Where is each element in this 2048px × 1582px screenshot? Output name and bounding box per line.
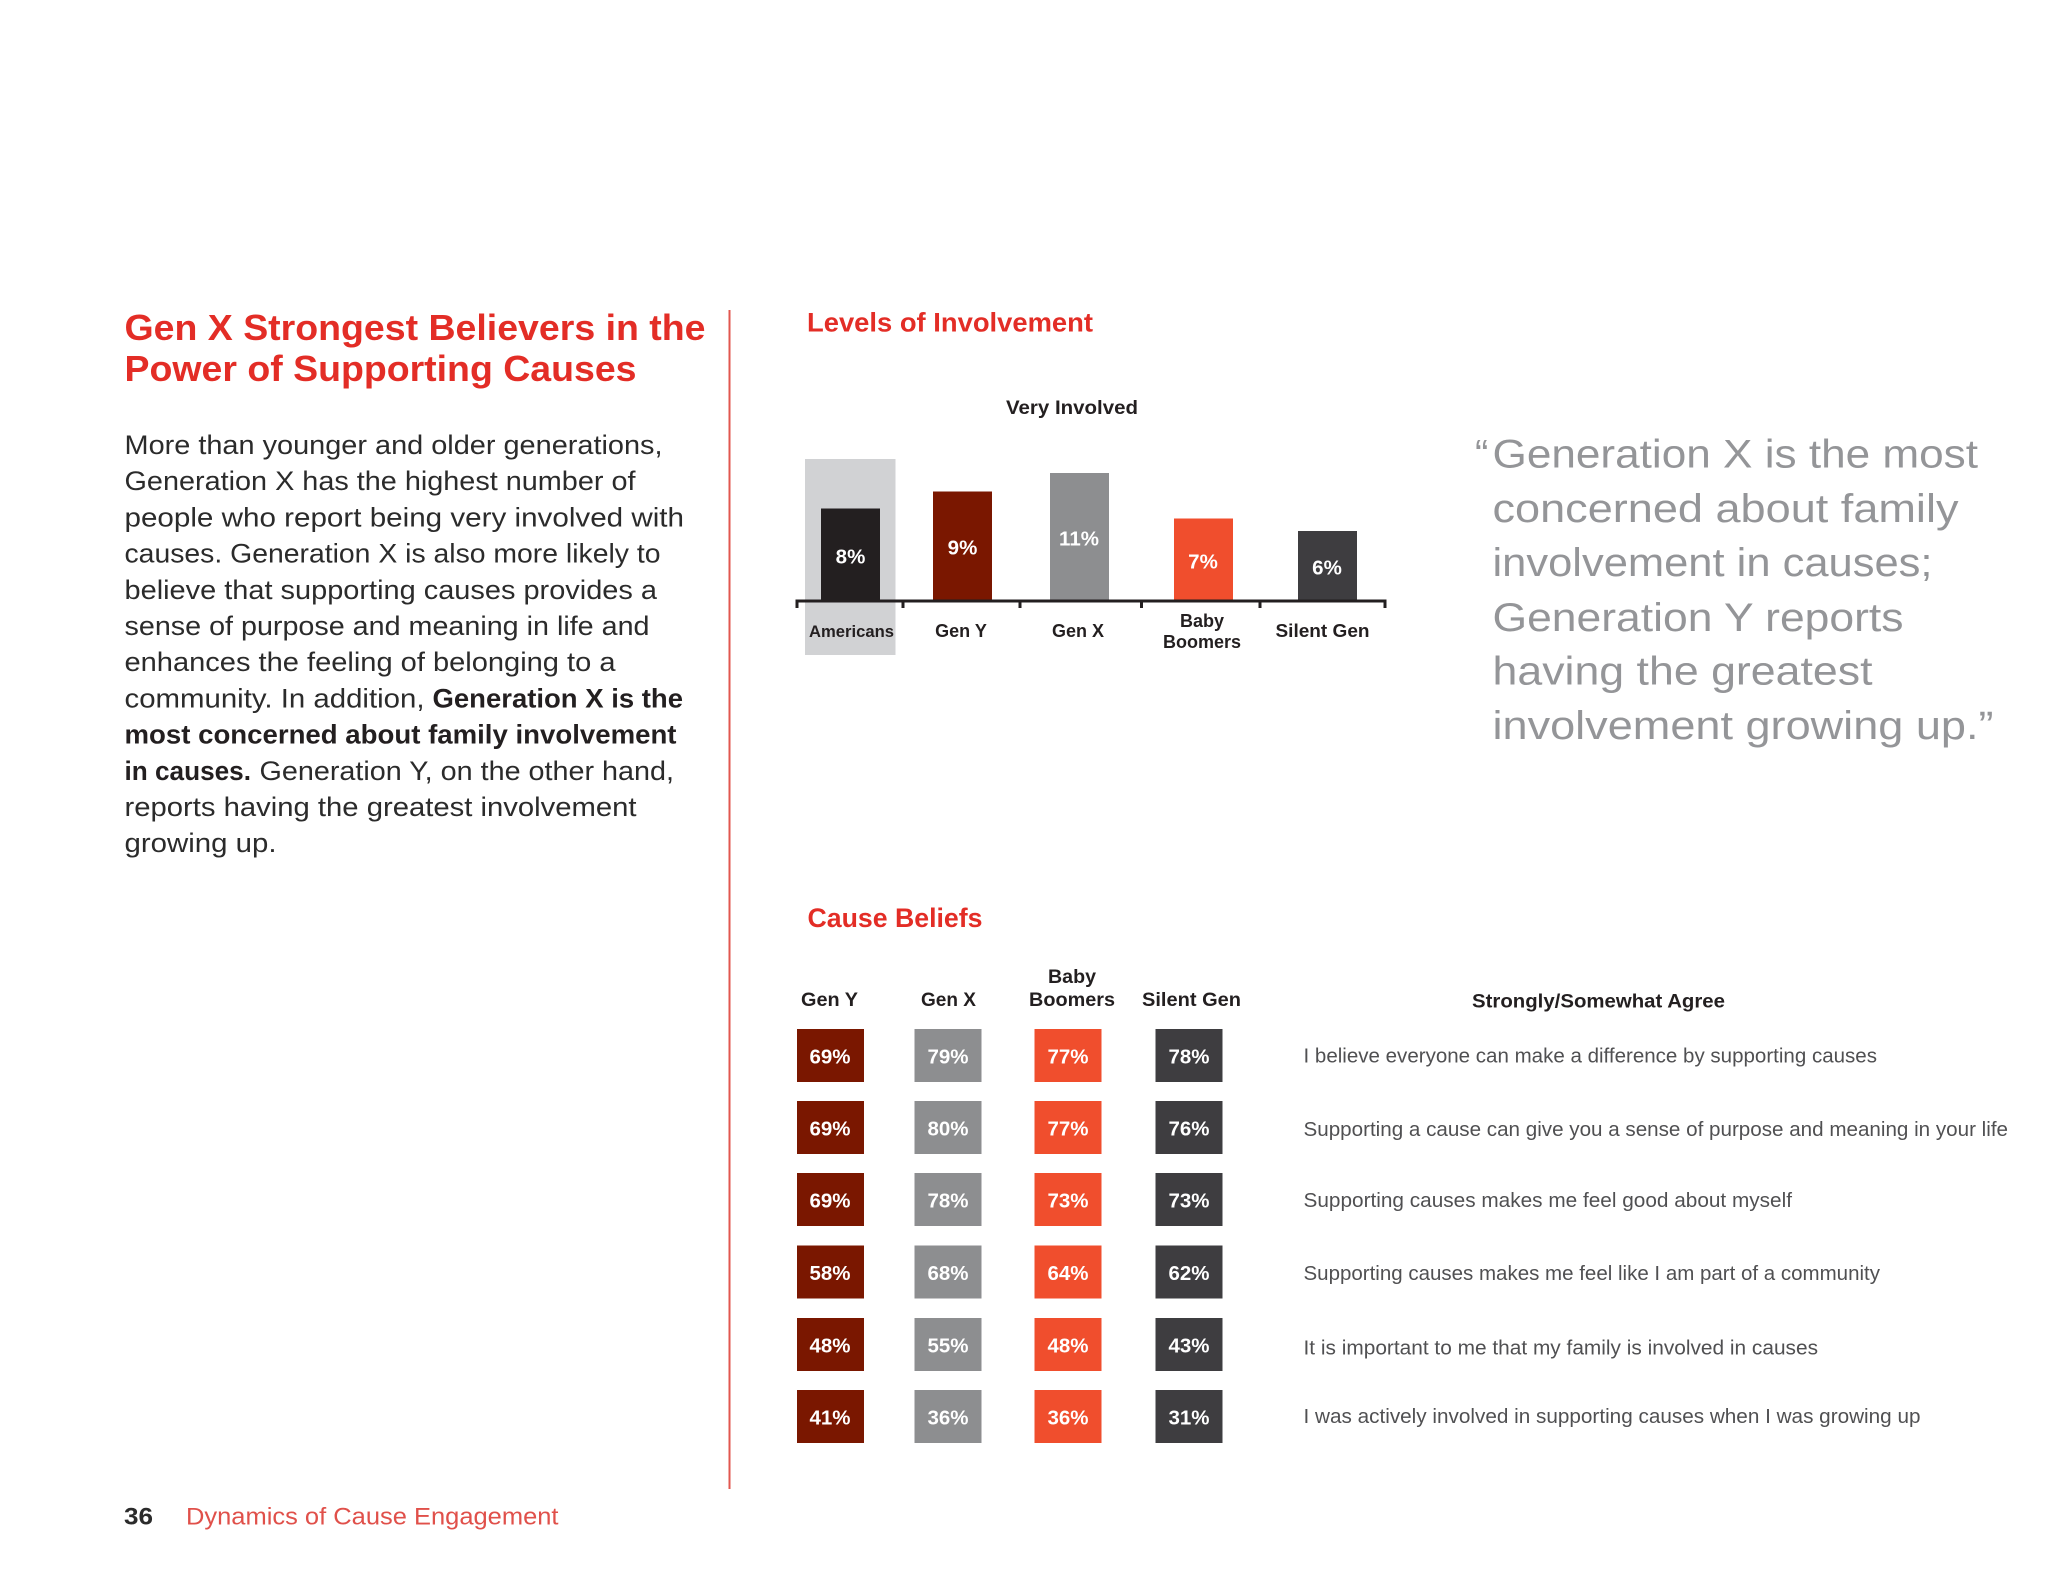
row 1: I believe everyone can make a difference by supporting causes [1304, 1044, 1877, 1068]
row 6: 36% [927, 1406, 969, 1430]
row 5: 48% [809, 1334, 851, 1358]
bar chart: very involved [797, 459, 1385, 655]
row 5: 55% [927, 1334, 969, 1358]
column headers [801, 966, 1725, 1012]
body text: causes. Generation X is also more likely to [124, 539, 660, 569]
chart title: very involved: Very Involved [1006, 397, 1138, 419]
pull quote: Generation Y reports [1492, 596, 1904, 640]
row 6: 41% [809, 1406, 851, 1430]
axis labels: Gen X [1052, 621, 1104, 641]
row 5 [797, 1318, 1818, 1371]
bar: Baby Boomers 7% [1174, 518, 1233, 601]
body text: in causes. [124, 756, 251, 786]
row 1 [797, 1029, 1877, 1082]
bar: Silent Gen 6%: 6% [1312, 556, 1342, 580]
row 6: 36% [1047, 1406, 1089, 1430]
axis labels [809, 611, 1370, 652]
row 2: Supporting a cause can give you a sense of purpose and meaning in your life [1304, 1118, 2008, 1141]
bar: Americans 8%: 8% [836, 546, 865, 568]
americans highlight band [805, 459, 896, 655]
row 4: Supporting causes makes me feel like I am part of a community [1304, 1262, 1881, 1285]
column headers: Gen Y [801, 989, 858, 1011]
row 1: 78% [1168, 1046, 1210, 1068]
pull quote: involvement in causes; [1492, 541, 1932, 585]
bar: Gen X 11%: 11% [1059, 528, 1099, 550]
row 2: 69% [809, 1118, 851, 1140]
axis with ticks [797, 601, 1385, 608]
row 3: Supporting causes makes me feel good about myself [1304, 1189, 1792, 1212]
pull quote: Generation X is the most [1492, 432, 1978, 476]
title: Power of Supporting Causes [124, 348, 636, 389]
row 6: I was actively involved in supporting causes when I was growing up [1304, 1405, 1920, 1428]
body text: Generation Y, on the other hand, [260, 756, 674, 786]
row 2: 77% [1047, 1118, 1089, 1140]
row 4: 68% [927, 1262, 969, 1285]
body text: More than younger and older generations, [124, 430, 662, 460]
bar: Silent Gen 6% [1298, 531, 1357, 601]
row 4: 62% [1168, 1262, 1210, 1285]
body text: Generation X is the [432, 683, 683, 713]
axis labels: Boomers [1163, 632, 1241, 652]
row 5: It is important to me that my family is involved in causes [1304, 1336, 1818, 1360]
row 3 [797, 1173, 1792, 1226]
row 4: 58% [809, 1262, 851, 1285]
row 4: 64% [1047, 1262, 1089, 1285]
heading: cause beliefs: Cause Beliefs [808, 903, 982, 933]
pull quote: concerned about family [1492, 487, 1958, 531]
panel: cause beliefs table [797, 1029, 2008, 1443]
row 6: 31% [1168, 1406, 1210, 1430]
row 1: 79% [927, 1046, 969, 1068]
row 2 [797, 1101, 2008, 1154]
bar: Gen Y 9% [933, 492, 992, 601]
row 3: 73% [1047, 1190, 1089, 1212]
body text: people who report being very involved with [124, 502, 684, 532]
row 1: 77% [1047, 1046, 1089, 1068]
axis labels: Silent Gen [1276, 621, 1370, 641]
title [124, 307, 705, 389]
body text: believe that supporting causes provides a [124, 575, 657, 605]
body text [124, 430, 684, 858]
pull quote: having the greatest [1492, 650, 1872, 694]
bar: Gen X 11% [1050, 473, 1109, 601]
body text: sense of purpose and meaning in life and [124, 611, 650, 641]
body text: enhances the feeling of belonging to a [124, 647, 616, 677]
footer: 36 [124, 1504, 153, 1530]
row 6 [797, 1390, 1920, 1443]
column headers: Strongly/Somewhat Agree [1472, 990, 1725, 1012]
body text: community. In addition, [124, 683, 424, 713]
column headers: Gen X [921, 989, 976, 1011]
bar: Americans 8% [821, 508, 880, 601]
pull quote: “ [1475, 432, 1488, 476]
column headers: Silent Gen [1142, 989, 1241, 1011]
pull quote [1475, 432, 1994, 748]
bar: Baby Boomers 7%: 7% [1188, 550, 1218, 574]
axis labels: Americans [809, 622, 894, 641]
row 3: 78% [927, 1190, 969, 1212]
footer: Dynamics of Cause Engagement [186, 1504, 559, 1530]
body text: Generation X has the highest number of [124, 466, 636, 496]
body text: growing up. [124, 828, 276, 858]
body text: reports having the greatest involvement [124, 792, 637, 822]
axis labels: Gen Y [935, 621, 987, 641]
column headers: Baby [1048, 966, 1096, 988]
body text: most concerned about family involvement [124, 720, 677, 750]
column headers: Boomers [1029, 989, 1115, 1011]
title: Gen X Strongest Believers in the [124, 307, 705, 348]
heading: levels of involvement: Levels of Involvement [807, 308, 1093, 338]
row 1: 69% [809, 1046, 851, 1068]
row 5: 43% [1168, 1334, 1210, 1358]
axis labels: Baby [1180, 611, 1224, 631]
row 2: 76% [1168, 1118, 1210, 1140]
row 2: 80% [927, 1118, 969, 1140]
bar: Gen Y 9%: 9% [948, 536, 977, 560]
row 5: 48% [1047, 1334, 1089, 1358]
vertical divider [728, 310, 730, 1489]
row 4 [797, 1246, 1881, 1298]
pull quote: involvement growing up.” [1492, 704, 1994, 748]
row 3: 73% [1168, 1190, 1210, 1212]
row 3: 69% [809, 1190, 851, 1212]
